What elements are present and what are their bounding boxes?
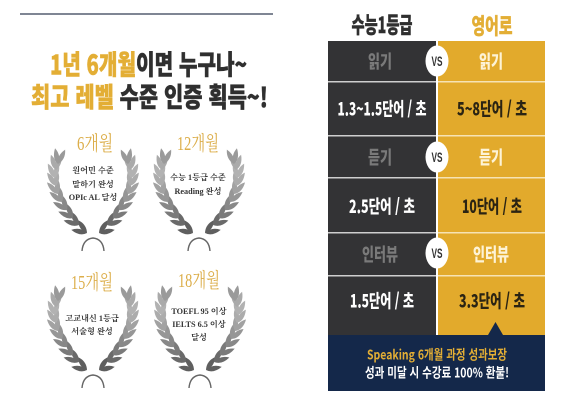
dark column [328, 41, 436, 335]
row: reading: 읽기 [479, 48, 503, 74]
right panel: comparison table [328, 8, 545, 391]
row: reading: VS [432, 53, 442, 69]
row: interview [350, 238, 525, 314]
callout: speaking guarantee [328, 322, 545, 391]
callout: speaking guarantee: 성과 미달 시 수강료 100% 환불! [365, 362, 509, 382]
milestone: 15 months [45, 270, 141, 388]
row: interview: VS [432, 245, 442, 261]
milestone: 18 months: TOEFL 95 이상 [171, 306, 227, 316]
row: listening: 듣기 [368, 144, 392, 170]
row: interview: 1.5단어 / 초 [350, 288, 414, 314]
row: listening: 10단어 / 초 [462, 193, 522, 219]
milestone: 6 months: 원어민 수준 [72, 165, 114, 175]
milestone: 15 months: 고교내신 1등급 [65, 313, 119, 323]
milestone: 12 months: 12개월 [177, 131, 219, 155]
row: reading [338, 46, 527, 122]
left panel: level roadmap [20, 13, 273, 388]
milestone: 12 months [151, 131, 247, 251]
milestone: 6 months: 6개월 [77, 131, 113, 155]
milestone: 15 months: 15개월 [71, 270, 113, 294]
gold column [438, 41, 545, 335]
row: reading: 5~8단어 / 초 [457, 96, 527, 122]
milestone: 15 months: 서술형 완성 [71, 326, 113, 336]
row: interview: 3.3단어 / 초 [459, 288, 525, 314]
column heading: CSAT grade 1: 수능1등급 [352, 8, 412, 40]
milestone: 18 months: 달성 [191, 332, 207, 342]
row: reading: 1.3~1.5단어 / 초 [338, 96, 426, 122]
heading: 1.5 years to top level: 최고 레벨 수준 인증 획득~! [31, 76, 268, 115]
heading: 1.5 years to top level: 1년 6개월이면 누구나~ [50, 44, 247, 82]
milestone: 12 months: Reading 완성 [175, 186, 221, 196]
milestone: 18 months [152, 268, 248, 388]
row: listening: 2.5단어 / 초 [349, 193, 415, 219]
row: listening [349, 142, 522, 219]
row: reading: 읽기 [368, 48, 392, 74]
heading: 1.5 years to top level [31, 44, 268, 115]
milestone: 12 months: 수능 1등급 수준 [170, 173, 226, 182]
callout: speaking guarantee: Speaking 6개월 과정 성과보장 [367, 344, 507, 364]
milestone: 6 months: 말하기 완성 [72, 179, 114, 189]
milestone: 6 months: OPIc AL 달성 [69, 192, 117, 202]
milestone: 18 months: IELTS 6.5 이상 [172, 319, 226, 329]
milestone: 18 months: 18개월 [178, 268, 220, 292]
row: listening: VS [432, 149, 442, 165]
row: listening: 듣기 [479, 144, 503, 170]
milestone: 6 months [45, 131, 141, 251]
column heading: with English: 영어로 [472, 9, 512, 41]
row: interview: 인터뷰 [473, 241, 509, 267]
row: interview: 인터뷰 [362, 241, 398, 267]
